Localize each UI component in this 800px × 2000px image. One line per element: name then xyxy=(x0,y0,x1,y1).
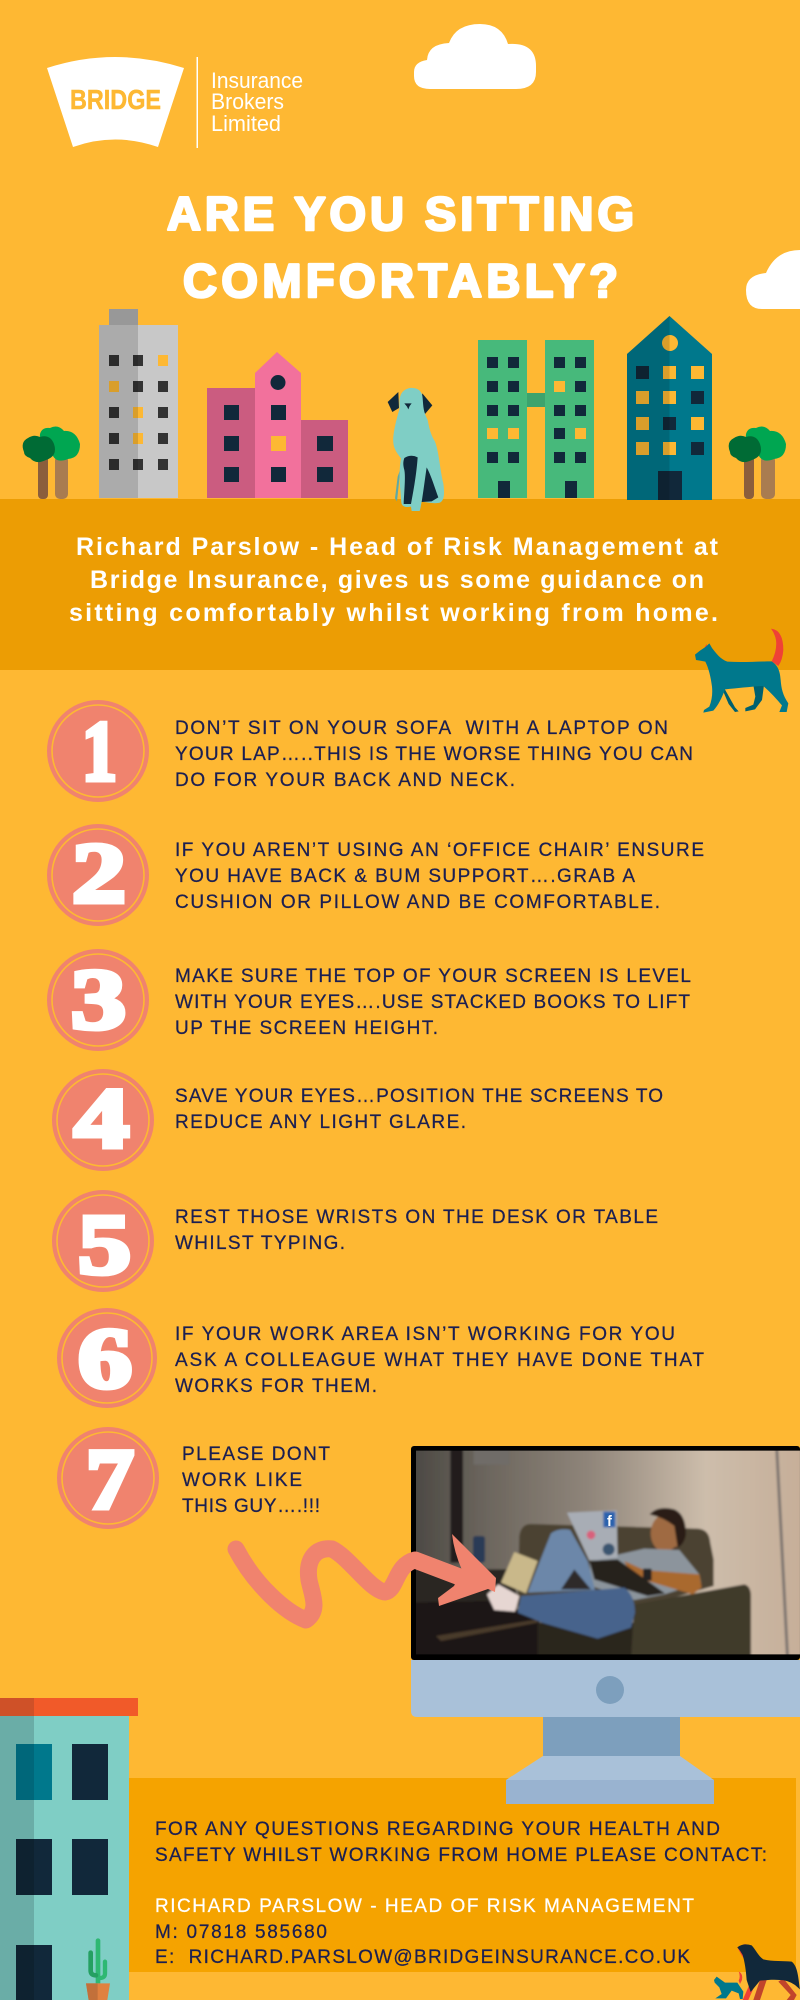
contact text: FOR ANY QUESTIONS REGARDING YOUR HEALTH AND xyxy=(155,1819,720,1840)
trees: left xyxy=(23,427,80,499)
panel: contact box xyxy=(129,1778,796,1972)
title: COMFORTABLY? xyxy=(183,254,618,307)
title: ARE YOU SITTING xyxy=(167,187,634,240)
tip 3 xyxy=(47,949,691,1051)
tip 2 xyxy=(47,824,704,926)
building: teal townhouse xyxy=(627,316,712,500)
contact text: E: RICHARD.PARSLOW@BRIDGEINSURANCE.CO.UK xyxy=(155,1947,690,1968)
tip 1: DO FOR YOUR BACK AND NECK. xyxy=(175,770,515,791)
tip 1 xyxy=(47,700,693,802)
tip 1: YOUR LAP…..THIS IS THE WORSE THING YOU CAN xyxy=(175,744,693,765)
tip 1: DON’T SIT ON YOUR SOFA WITH A LAPTOP ON xyxy=(175,718,668,739)
tip 4 xyxy=(52,1069,663,1171)
tip 3: UP THE SCREEN HEIGHT. xyxy=(175,1018,438,1039)
tip 3: 3 xyxy=(71,951,126,1047)
monitor xyxy=(411,1446,800,1804)
intro text: Richard Parslow - Head of Risk Management at xyxy=(76,533,719,561)
tip 6: IF YOUR WORK AREA ISN’T WORKING FOR YOU xyxy=(175,1324,675,1345)
tip 4: REDUCE ANY LIGHT GLARE. xyxy=(175,1112,466,1133)
tip 7: PLEASE DONT xyxy=(182,1444,330,1465)
tip 3: MAKE SURE THE TOP OF YOUR SCREEN IS LEVEL xyxy=(175,966,691,987)
logo: Bridge Insurance Brokers Limited xyxy=(47,57,303,148)
tip 2: 2 xyxy=(72,825,126,921)
icon: potted cactus xyxy=(86,1938,110,2000)
contact text: SAFETY WHILST WORKING FROM HOME PLEASE CONTACT: xyxy=(155,1845,767,1866)
icon: dog and cat, bottom right xyxy=(714,1944,800,2000)
tip 4: SAVE YOUR EYES…POSITION THE SCREENS TO xyxy=(175,1086,663,1107)
tip 6: 6 xyxy=(78,1310,132,1406)
building: grey tower xyxy=(99,309,178,498)
contact text: M: 07818 585680 xyxy=(155,1922,327,1943)
cloud: top xyxy=(414,24,536,89)
tip 5: REST THOSE WRISTS ON THE DESK OR TABLE xyxy=(175,1207,658,1228)
intro text xyxy=(69,533,719,627)
intro text: Bridge Insurance, gives us some guidance on xyxy=(90,566,704,594)
tip 6: WORKS FOR THEM. xyxy=(175,1376,377,1397)
title xyxy=(167,187,634,307)
tip 7 xyxy=(57,1427,330,1529)
building: bottom-left teal block xyxy=(0,1698,138,2000)
logo: Bridge Insurance Brokers Limited: Insurance xyxy=(211,68,303,93)
tip 2: IF YOU AREN’T USING AN ‘OFFICE CHAIR’ ENSURE xyxy=(175,840,704,861)
tip 6 xyxy=(57,1308,704,1408)
logo: Bridge Insurance Brokers Limited: BRIDGE xyxy=(70,84,161,115)
arrow: squiggle pointing to photo xyxy=(236,1534,496,1620)
cloud: right xyxy=(746,250,800,309)
tip 5: 5 xyxy=(78,1196,131,1292)
tip 7: THIS GUY….!!! xyxy=(182,1496,320,1517)
tip 1: 1 xyxy=(82,703,117,799)
tip 2: CUSHION OR PILLOW AND BE COMFORTABLE. xyxy=(175,892,660,913)
tip 6: ASK A COLLEAGUE WHAT THEY HAVE DONE THAT xyxy=(175,1350,704,1371)
intro text: sitting comfortably whilst working from home. xyxy=(69,599,718,627)
tip 7: WORK LIKE xyxy=(182,1470,302,1491)
logo: Bridge Insurance Brokers Limited: Limited xyxy=(211,111,281,136)
contact text xyxy=(155,1819,767,1968)
logo: Bridge Insurance Brokers Limited: Brokers xyxy=(211,89,284,114)
photo: man slouching on sofa with laptop xyxy=(411,1446,800,1659)
monitor stand base over contact box xyxy=(506,1776,714,1804)
tip 4: 4 xyxy=(74,1070,129,1166)
contact text: RICHARD PARSLOW - HEAD OF RISK MANAGEMENT xyxy=(155,1896,694,1917)
photo: man slouching on sofa with laptop: f xyxy=(607,1514,612,1530)
building: pink house xyxy=(207,352,348,498)
band: intro background xyxy=(0,499,800,670)
tip 3: WITH YOUR EYES….USE STACKED BOOKS TO LIFT xyxy=(175,992,690,1013)
tip 5 xyxy=(52,1190,658,1292)
tip 2: YOU HAVE BACK & BUM SUPPORT….GRAB A xyxy=(175,866,635,887)
tip 7: 7 xyxy=(86,1431,134,1527)
icon: seated dog xyxy=(388,388,444,511)
building: green twin towers xyxy=(478,340,594,498)
icon: walking cat xyxy=(695,629,788,713)
tip 5: WHILST TYPING. xyxy=(175,1233,345,1254)
trees: right xyxy=(729,427,786,499)
